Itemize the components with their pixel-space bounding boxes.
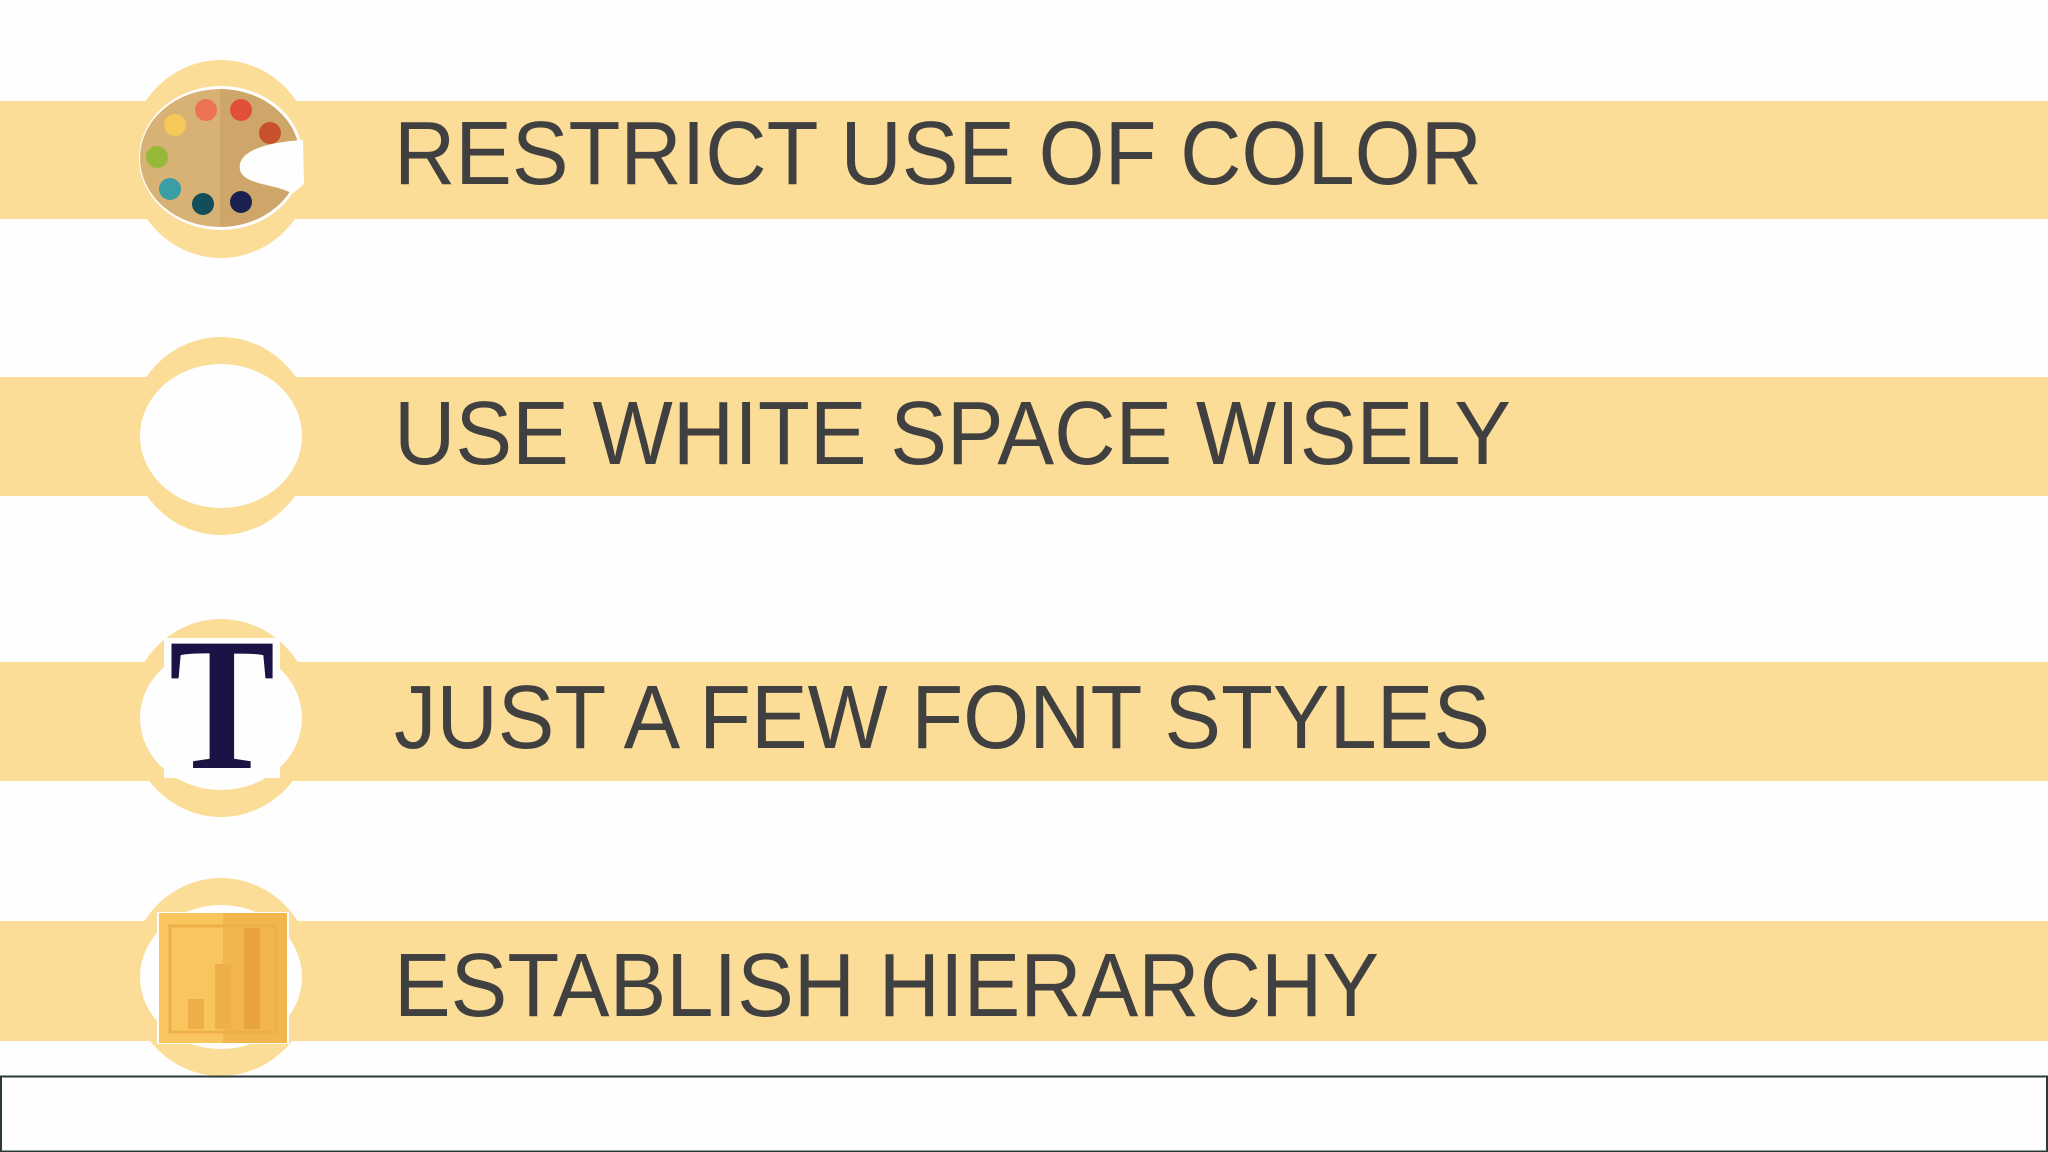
band 3: just a few font styles bbox=[0, 600, 2048, 817]
icon: empty white circle bbox=[140, 364, 302, 508]
icon: palette bbox=[139, 86, 304, 230]
heading: establish hierarchy: ESTABLISH HIERARCHY bbox=[394, 936, 1379, 1036]
heading: use white space wisely: USE WHITE SPACE WISELY bbox=[394, 384, 1511, 484]
heading: restrict use of color: RESTRICT USE OF COLOR bbox=[394, 104, 1482, 204]
band 1: restrict use of color bbox=[0, 60, 2048, 258]
band 2: use white space wisely bbox=[0, 337, 2048, 535]
bottom bar bbox=[1, 1076, 2047, 1152]
band 4: establish hierarchy bbox=[0, 878, 2048, 1076]
icon: bar chart bbox=[140, 905, 302, 1049]
heading: just a few font styles: JUST A FEW FONT STYLES bbox=[394, 668, 1490, 768]
icon: serif T: T bbox=[169, 600, 275, 810]
